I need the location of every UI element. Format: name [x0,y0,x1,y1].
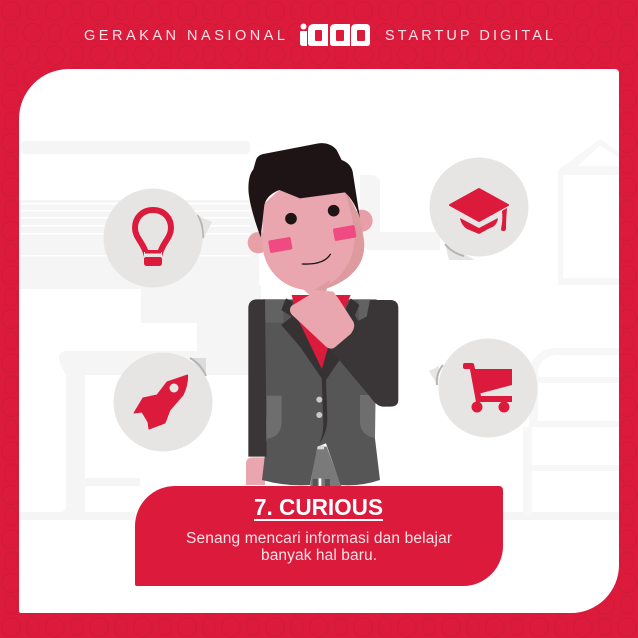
background furniture silhouettes [19,139,619,520]
logo: 1000 [300,24,370,46]
header: Startup Digital: STARTUP DIGITAL [385,28,553,44]
character: thinking businessman [246,143,398,487]
heading: 7. Curious: 7. CURIOUS [254,494,383,520]
icon: shopping cart bubble [429,338,538,438]
panel: caption [135,486,503,586]
character head [248,143,373,297]
caption text: Senang mencari informasi dan belajar [186,530,452,547]
icon: lightbulb bubble [104,188,212,288]
caption text [186,530,452,564]
heading underline [254,519,383,521]
icon: graduation cap bubble [430,158,528,260]
header: Gerakan Nasional: GERAKAN NASIONAL [84,28,285,44]
character hand on chin [288,275,354,349]
caption text: banyak hal baru. [261,547,377,564]
character body and jacket [246,295,398,487]
icon: rocket bubble [114,352,212,452]
